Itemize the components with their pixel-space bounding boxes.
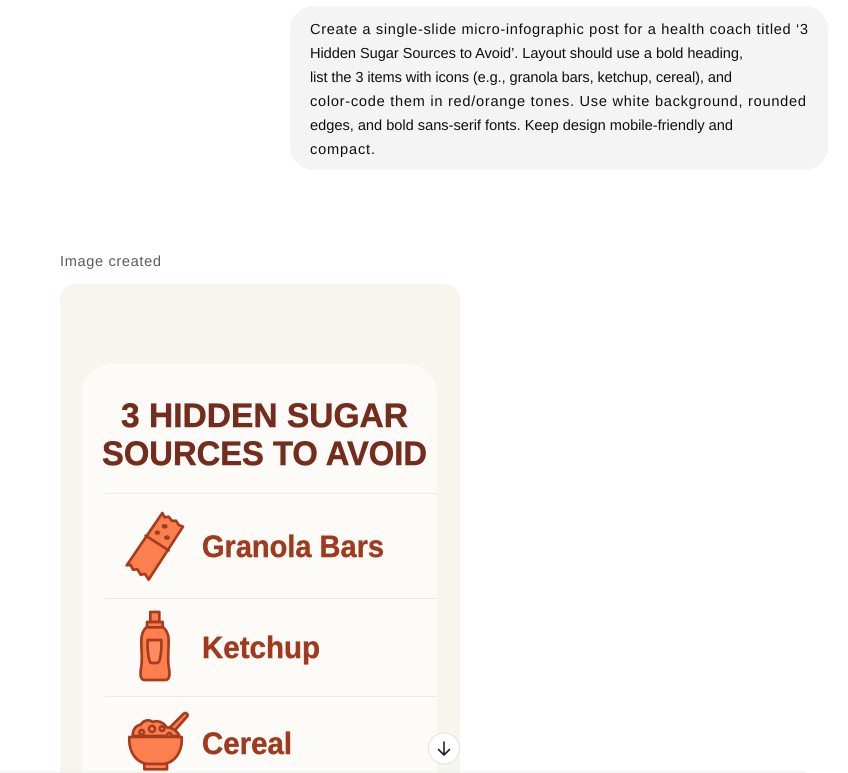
prompt text: color-code them in red/orange tones. Use white background, rounded [310, 94, 806, 110]
heading: SOURCES TO AVOID [102, 435, 427, 473]
prompt text: list the 3 items with icons (e.g., granola bars, ketchup, cereal), and [310, 70, 732, 86]
label: ketchup: Ketchup [202, 630, 320, 665]
prompt text: Hidden Sugar Sources to Avoid’. Layout should use a bold heading, [310, 46, 743, 62]
list item: granola bars [127, 513, 384, 580]
list item: ketchup [141, 612, 320, 680]
label: granola bars: Granola Bars [202, 529, 384, 564]
inner card [82, 364, 437, 773]
generated infographic image [60, 284, 460, 773]
icon: ketchup bottle [141, 612, 169, 680]
icon: cereal bowl [129, 713, 188, 769]
icon: down arrow [438, 742, 450, 755]
icon: granola bar [127, 513, 183, 580]
list item: cereal [129, 713, 292, 769]
prompt text: Create a single-slide micro-infographic post for a health coach titled ‘3 [310, 22, 808, 38]
prompt text [310, 22, 808, 158]
prompt text: compact. [310, 142, 375, 158]
label: cereal: Cereal [202, 726, 292, 761]
heading [102, 397, 427, 473]
image created label: Image created [60, 254, 161, 270]
scroll down button [428, 733, 460, 764]
heading: 3 HIDDEN SUGAR [121, 397, 408, 435]
prompt text: edges, and bold sans-serif fonts. Keep design mobile-friendly and [310, 118, 733, 134]
prompt chat bubble [290, 6, 828, 170]
